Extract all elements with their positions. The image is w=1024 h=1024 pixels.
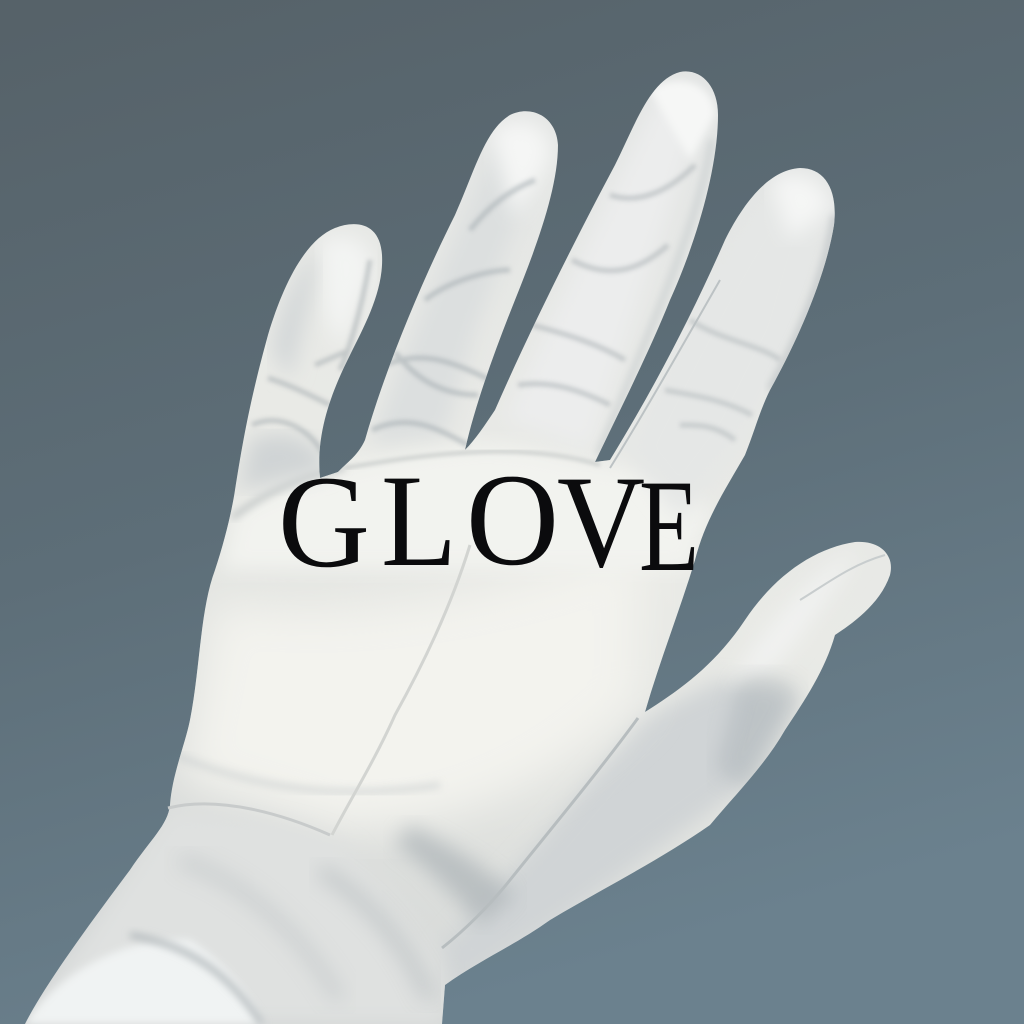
seam: thumb xyxy=(442,718,638,948)
seam: fourth finger xyxy=(610,280,720,468)
title: GLOVE: V xyxy=(557,448,645,595)
seam: thumb tip xyxy=(800,555,885,600)
title: GLOVE: G xyxy=(278,448,370,595)
seam: wrist fold xyxy=(168,804,330,835)
seam: back of hand xyxy=(332,545,470,835)
finger shading xyxy=(240,434,330,490)
glove shading xyxy=(25,81,860,1024)
title: GLOVE: L xyxy=(381,447,457,594)
title: GLOVE: O xyxy=(466,446,559,593)
title: GLOVE xyxy=(278,446,699,599)
glove silhouette xyxy=(25,71,891,1024)
glove xyxy=(25,71,891,1024)
title: GLOVE: E xyxy=(639,452,699,599)
